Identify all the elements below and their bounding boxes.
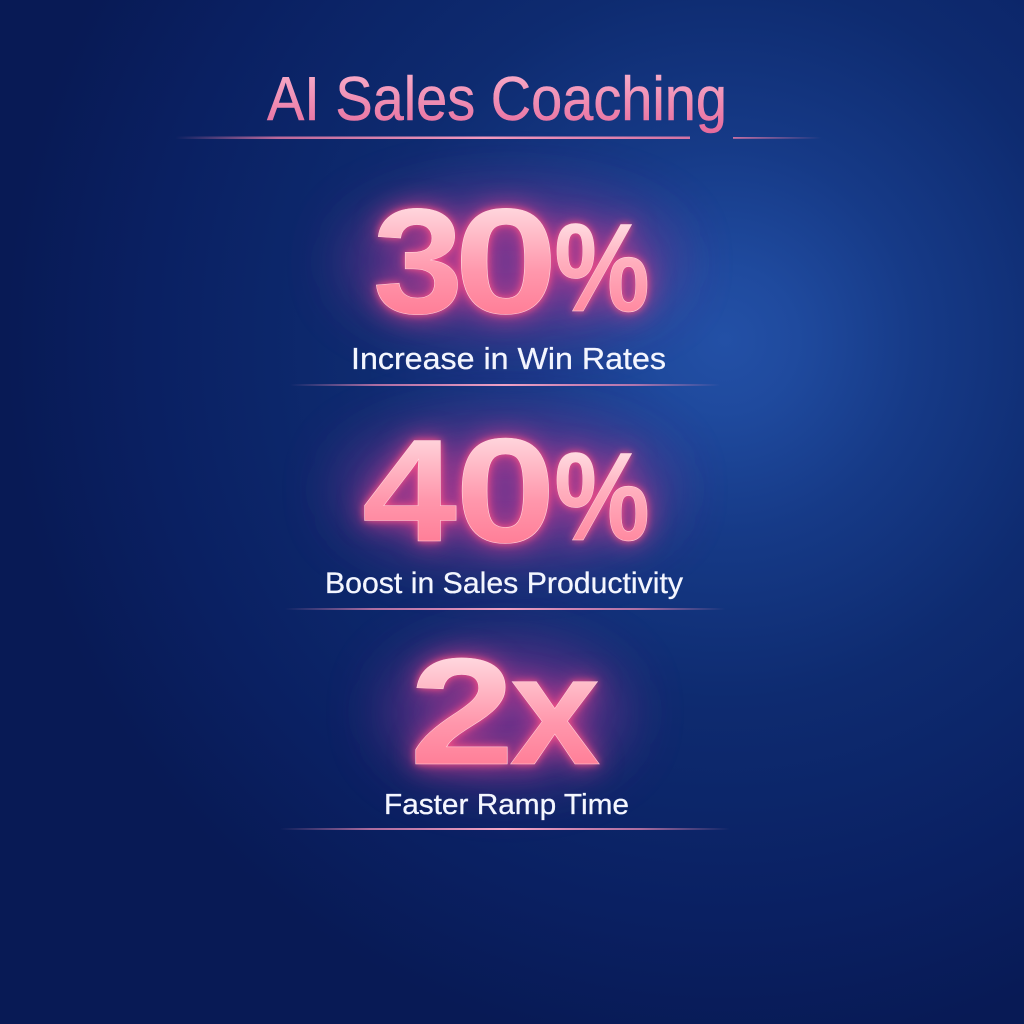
stat 2 purple haze <box>345 428 665 552</box>
stat 3 number <box>409 623 601 797</box>
stat 3 number: x <box>509 623 601 797</box>
stat 2 number: 0 <box>455 408 556 574</box>
stat 1 number <box>373 177 650 346</box>
stat 1 number: 3 <box>373 178 463 346</box>
stat 2 number: % <box>554 426 650 567</box>
title: AI Sales Coaching <box>267 65 727 134</box>
stat 1 label: Increase in Win Rates <box>351 341 666 376</box>
stat 2 number: 4 <box>362 409 457 572</box>
stat 1: 30% <box>350 177 670 346</box>
stat 3: 2x <box>390 623 620 797</box>
stat 3 divider <box>280 828 730 830</box>
stat 3 label: Faster Ramp Time <box>384 789 629 821</box>
stat 2 divider <box>285 608 725 610</box>
stat 2 number <box>362 408 650 574</box>
stat 2 label: Boost in Sales Productivity <box>325 567 683 600</box>
stat 1 number: % <box>554 197 650 338</box>
stat 1 number: 0 <box>454 177 558 345</box>
stat 1 purple haze <box>350 200 670 324</box>
stat 1 divider <box>290 384 720 386</box>
stat 3 purple haze <box>390 650 620 774</box>
stat 3 number: 2 <box>409 627 515 797</box>
title underline <box>175 136 821 139</box>
stat 2: 40% <box>345 408 665 574</box>
